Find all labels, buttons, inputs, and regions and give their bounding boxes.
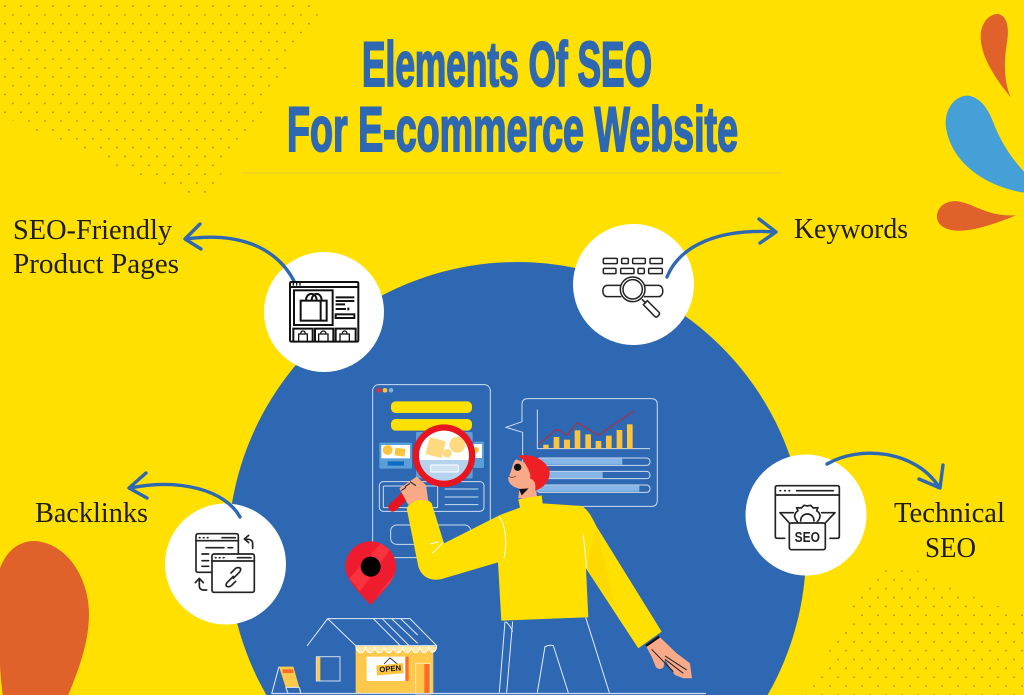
decorative blob bottom left — [0, 541, 89, 695]
dot pattern bottom right — [806, 566, 1024, 695]
illustration: shop: OPEN — [379, 663, 402, 674]
white circle: keywords — [573, 224, 694, 345]
dot pattern top left — [0, 0, 325, 196]
icon: keyword search — [603, 258, 663, 317]
white circle: product pages — [264, 252, 384, 372]
arrow to technical SEO — [827, 453, 943, 488]
white circle: technical SEO — [746, 454, 866, 576]
illustration: person — [407, 455, 692, 693]
arrow to SEO-friendly product pages — [185, 224, 294, 281]
label: Technical SEO — [894, 498, 1005, 564]
title: For E-commerce Website — [287, 95, 738, 165]
label: SEO-Friendly Product Pages: Product Pages — [13, 249, 179, 280]
label: Backlinks: Backlinks — [35, 498, 148, 529]
decorative drops top right — [937, 14, 1024, 231]
blue central circle — [228, 262, 806, 695]
label: Technical SEO: SEO — [925, 533, 976, 564]
illustration: chart speech bubble — [506, 399, 657, 506]
title — [287, 30, 738, 165]
illustration: shop — [272, 619, 437, 694]
illustration: magnifying glass and hand — [393, 424, 475, 507]
arrow to keywords — [667, 219, 776, 277]
label: SEO-Friendly Product Pages — [13, 215, 179, 280]
title divider — [242, 172, 782, 174]
arrow to backlinks — [129, 473, 240, 517]
illustration: website mockup — [373, 385, 490, 558]
white circle: backlinks — [165, 504, 286, 624]
icon: product page — [290, 282, 358, 342]
label: SEO-Friendly Product Pages: SEO-Friendly — [13, 215, 172, 246]
icon: technical SEO — [775, 486, 839, 550]
label: Keywords: Keywords — [794, 214, 908, 245]
icon: technical SEO: SEO — [795, 530, 820, 546]
title: Elements Of SEO — [362, 30, 652, 100]
label: Technical SEO: Technical — [894, 498, 1005, 529]
icon: location pin — [345, 541, 396, 605]
icon: backlinks — [195, 534, 254, 592]
ground line — [272, 692, 706, 694]
